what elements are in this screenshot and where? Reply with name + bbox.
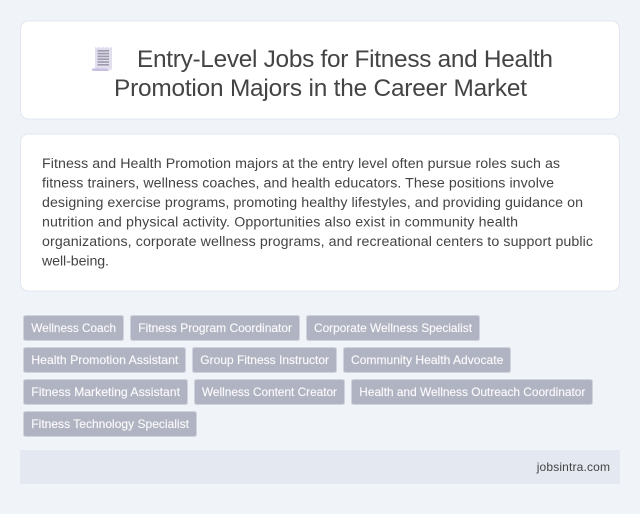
tag list (24, 316, 592, 436)
description text: designing exercise programs, promoting healthy lifestyles, and providing guidance on (42, 195, 583, 211)
tag (24, 412, 196, 436)
title (114, 46, 553, 102)
tag: Corporate Wellness Specialist (314, 321, 473, 335)
footer source text: jobsintra.com (536, 460, 610, 474)
title: Entry-Level Jobs for Fitness and Health (137, 46, 553, 73)
tag: Health Promotion Assistant (31, 353, 179, 367)
tag: Community Health Advocate (351, 353, 504, 367)
tag (194, 380, 344, 404)
tag: Group Fitness Instructor (200, 353, 329, 367)
tag (24, 316, 124, 340)
description text: Fitness and Health Promotion majors at the entry level often pursue roles such as (42, 156, 560, 172)
tag: Fitness Technology Specialist (31, 417, 190, 431)
icon: paper scroll (92, 47, 112, 71)
description text: well-being. (41, 254, 109, 270)
tag (24, 380, 188, 404)
tag: Wellness Coach (31, 321, 116, 335)
tag (344, 348, 510, 372)
description text (41, 156, 593, 270)
description text: organizations, corporate wellness programs, and recreational centers to support public (42, 234, 593, 250)
tag (306, 316, 480, 340)
panel: description card (20, 134, 620, 291)
tag: Fitness Marketing Assistant (31, 385, 181, 399)
tag (352, 380, 592, 404)
description text: nutrition and physical activity. Opportunities also exist in community health (42, 214, 518, 230)
panel: title card (20, 21, 620, 119)
footer bar (20, 450, 620, 484)
tag: Fitness Program Coordinator (138, 321, 292, 335)
tag (130, 316, 300, 340)
tag (24, 348, 186, 372)
tag: Health and Wellness Outreach Coordinator (359, 385, 585, 399)
description text: fitness trainers, wellness coaches, and health educators. These positions involve (42, 176, 554, 192)
title: Promotion Majors in the Career Market (114, 75, 527, 102)
tag (192, 348, 336, 372)
tag: Wellness Content Creator (202, 385, 337, 399)
